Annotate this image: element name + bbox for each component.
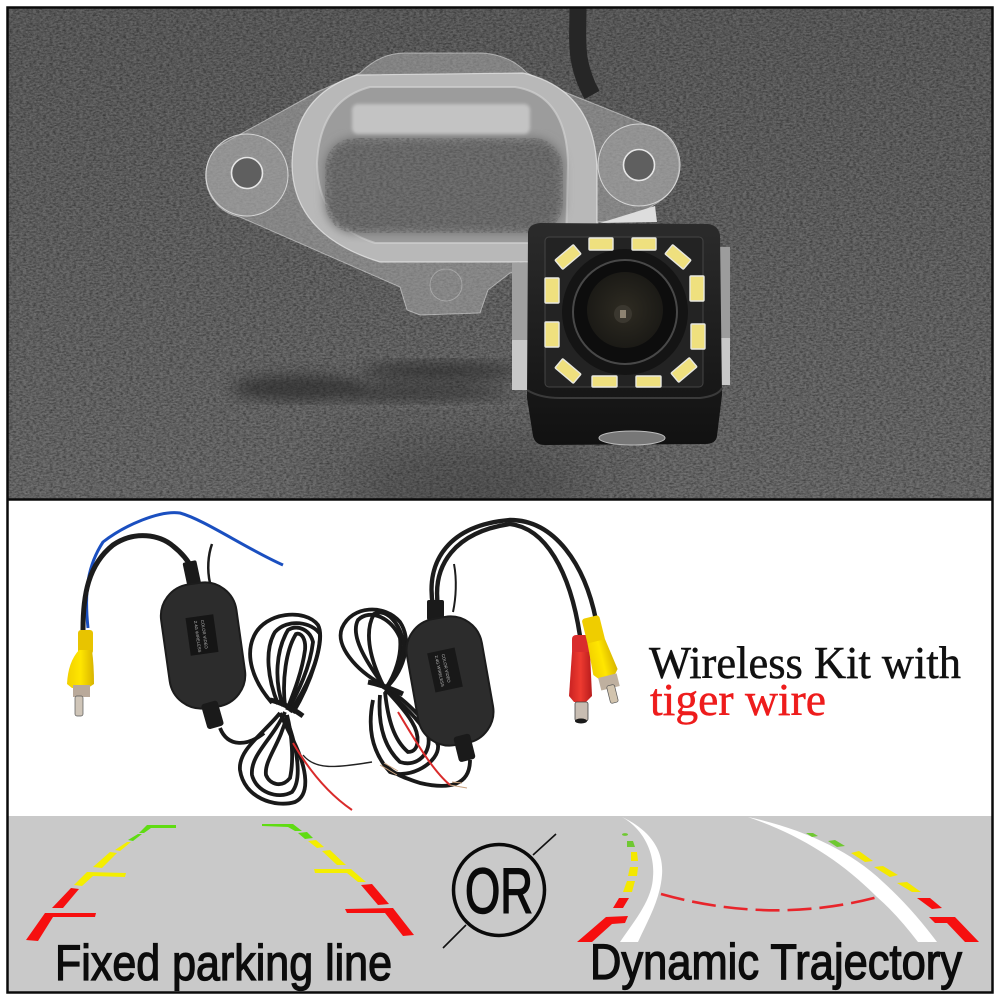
receiver twin cable xyxy=(432,520,596,636)
label: fixed parking line: Fixed parking line xyxy=(55,935,392,991)
transmitter unit xyxy=(67,513,372,810)
dome dark interior xyxy=(325,138,563,233)
yellow RCA plug xyxy=(580,614,625,706)
cable coil xyxy=(220,615,320,804)
copper ends xyxy=(380,763,467,788)
camera body xyxy=(527,223,722,445)
panel: camera photo xyxy=(8,8,992,530)
panel: wireless kit xyxy=(8,500,992,816)
white guide curves xyxy=(620,817,662,942)
grey background xyxy=(8,816,992,992)
red lead xyxy=(293,743,352,810)
transmitter box xyxy=(157,578,249,713)
panel: parking lines xyxy=(8,816,992,992)
fixed parking line graphic xyxy=(26,824,414,941)
black lead xyxy=(303,755,372,766)
receiver coil xyxy=(341,610,470,786)
output strain relief xyxy=(201,700,224,730)
yellow RCA plug xyxy=(67,630,94,716)
receiver strain relief xyxy=(427,600,444,620)
lower right ground shading xyxy=(340,450,600,530)
right mounting ear xyxy=(598,124,680,206)
lens xyxy=(562,249,688,375)
strain relief xyxy=(182,560,201,586)
transmitter label: COLOR VIDEO xyxy=(200,619,209,650)
white background xyxy=(8,500,992,816)
lamp dome xyxy=(292,73,597,262)
OR badge xyxy=(443,834,556,948)
asphalt background xyxy=(8,8,992,499)
receiver antenna xyxy=(453,564,456,612)
red DC plug xyxy=(569,635,592,724)
antenna xyxy=(208,544,212,583)
left mounting ear xyxy=(206,134,288,216)
receiver label xyxy=(427,648,463,692)
dynamic trajectory graphic xyxy=(577,817,979,942)
bracket shadow xyxy=(232,362,518,401)
receiver box xyxy=(401,611,499,751)
receiver label: COLOR VIDEO xyxy=(441,654,452,684)
blue wire xyxy=(87,513,283,628)
red dashed path xyxy=(661,894,878,910)
black cable xyxy=(83,536,193,630)
number plate lamp bracket xyxy=(206,53,680,315)
receiver output relief xyxy=(453,733,476,763)
dome highlight band xyxy=(352,104,530,134)
bottom tab circle xyxy=(430,269,462,301)
camera cable xyxy=(578,8,592,95)
camera face xyxy=(545,237,703,387)
dome window xyxy=(317,87,568,243)
camera xyxy=(527,223,722,445)
caption: wireless kit xyxy=(649,637,961,725)
transmitter label xyxy=(185,614,219,656)
caption: wireless kit: tiger wire xyxy=(650,674,826,725)
OR badge: OR xyxy=(465,855,533,927)
LED ring xyxy=(545,238,705,387)
receiver unit xyxy=(341,520,625,788)
camera badge xyxy=(599,431,665,445)
transmitter label: 2.4G WIRELESS xyxy=(193,620,202,653)
receiver label: 2.4G WIRELESS xyxy=(434,655,445,687)
caption: wireless kit: Wireless Kit with xyxy=(649,637,961,688)
camera mount strips xyxy=(512,206,730,390)
receiver red lead xyxy=(398,712,450,785)
